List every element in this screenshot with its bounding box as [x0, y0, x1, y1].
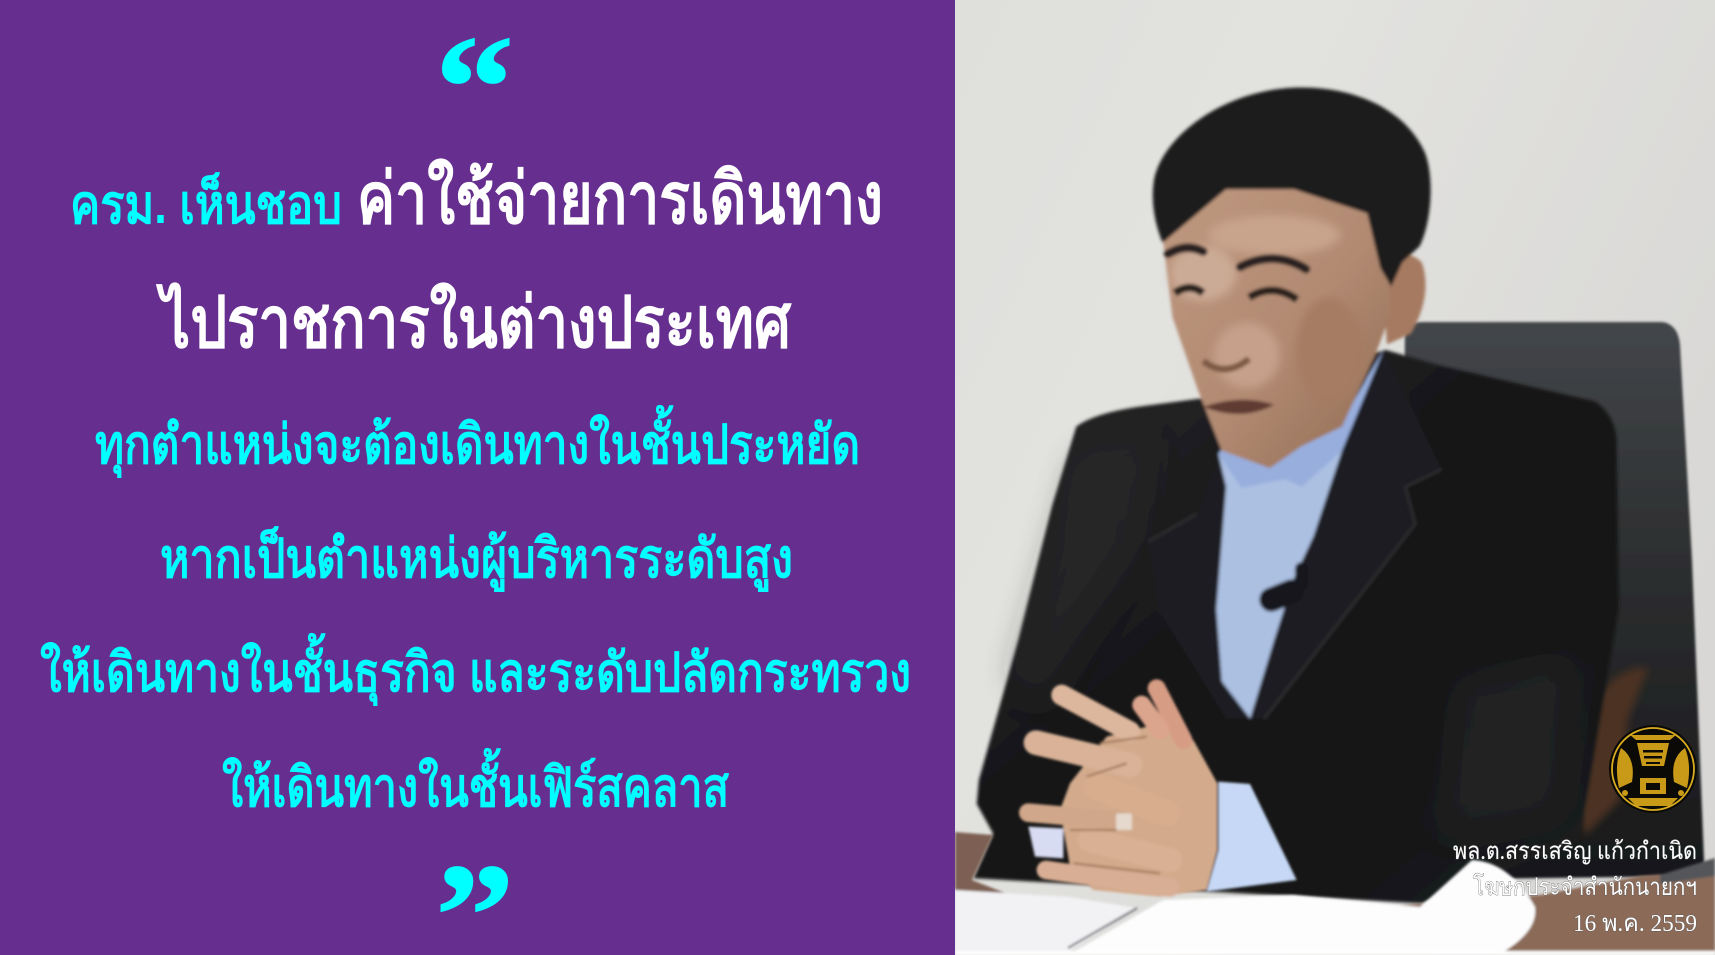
finger creases: [1070, 737, 1160, 873]
lapel edges: [1148, 469, 1442, 719]
ring: [1116, 813, 1132, 830]
ear: [1381, 254, 1426, 345]
panel: purple quote panel: [0, 0, 955, 955]
lapel microphone: [1256, 562, 1308, 615]
photo background wall: [955, 0, 1715, 955]
office chair: [1400, 322, 1704, 880]
heading line 1: ครม. เห็นชอบ: [70, 173, 342, 235]
jacket folds: [1012, 438, 1575, 831]
eyebrows: [1168, 248, 1306, 269]
face shading: [1170, 215, 1362, 402]
eyes: [1175, 288, 1297, 300]
jacket lapels: [1148, 350, 1442, 719]
left paper sheet: [955, 890, 1137, 951]
heading line 1: ค่าใช้จ่ายการเดินทาง: [357, 157, 883, 239]
body line 3: ให้เดินทางในชั้นธุรกิจ และระดับปลัดกระทรวง: [40, 633, 911, 707]
carved wood of chair: [1572, 668, 1648, 835]
shirt collar: [1218, 350, 1384, 488]
shirt: [1216, 350, 1384, 719]
hand: [1060, 723, 1217, 897]
caption: spokesperson name, title, date: 16 พ.ค. 2559: [1573, 911, 1697, 937]
mouth: [1203, 400, 1274, 414]
opening quotation mark: “: [435, 6, 514, 170]
body line 4: ให้เดินทางในชั้นเฟิร์สคลาส: [222, 748, 729, 818]
nose: [1203, 359, 1249, 369]
hair: [1153, 88, 1431, 287]
table and papers: [955, 832, 1715, 955]
face: [1163, 180, 1391, 468]
closing quotation mark: “: [436, 780, 515, 944]
shirt cuffs: [1207, 782, 1297, 892]
heading line 1: [70, 157, 883, 239]
heading line 2: ไปราชการในต่างประเทศ: [155, 281, 792, 363]
caption: spokesperson name, title, date: [1453, 839, 1697, 937]
body line 1: ทุกตำแหน่งจะต้องเดินทางในชั้นประหยัด: [95, 405, 860, 479]
jacket: [973, 350, 1619, 903]
photo: spokesperson seated at a desk: [955, 0, 1715, 955]
clasped hands with ring: [1028, 688, 1297, 897]
man in suit: [973, 88, 1619, 903]
icon: government seal: [1609, 725, 1697, 813]
body line 2: หากเป็นตำแหน่งผู้บริหารระดับสูง: [160, 527, 793, 592]
right paper sheet: [1075, 860, 1535, 951]
